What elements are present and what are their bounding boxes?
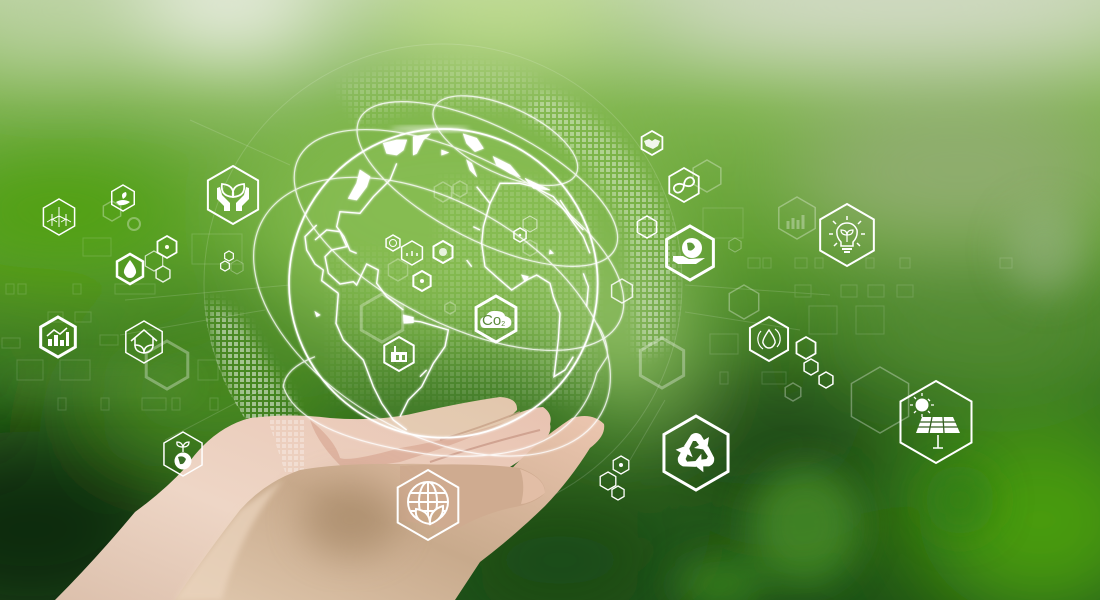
South America outline [336,293,448,430]
icon: water drop [117,254,143,284]
icon: bar chart [41,317,75,357]
icon: house with leaves [126,321,162,363]
icon: CO2 cloud [476,296,516,342]
ghost hexagons in background [103,160,909,433]
palm shadow creases [310,420,505,470]
globe with continent outlines [206,68,658,514]
hex with tiny chart [402,241,422,265]
hex with dot [413,271,431,291]
Africa outline [477,183,590,377]
small hexagons inside globe [386,216,537,291]
icon: globe with leaves [398,470,458,540]
hand shadow [302,484,398,556]
icon: light bulb with sprout [820,204,874,266]
small hexagon cluster [221,251,233,271]
dotted world map sphere [200,40,690,522]
hex with target [386,235,400,251]
hand behind: left cupped hand [55,397,551,600]
thumbnail [520,469,545,504]
hexagon empty right of globe [612,279,632,303]
hand in front: right cupped hand and thumb [175,416,604,600]
icon: hand holding globe [667,226,713,280]
finger gaps [430,412,540,462]
palm dots over hand [268,418,305,478]
hexagon cluster bottom [600,456,629,500]
icon: water cycle drop [750,317,788,361]
hex empty [523,216,537,232]
hexagon empty near globe [637,216,657,238]
icon: wind turbines [43,199,75,235]
hex with dot right [514,228,526,242]
icon: hands holding leaves [208,166,258,224]
icon: hand with sprout small [112,185,134,211]
hexagon trio right [796,337,833,388]
icon: recycle arrows [664,416,728,490]
Greenland and arctic land [315,134,553,323]
hexagon cluster left [145,236,177,282]
orbit ellipses [206,68,658,514]
East coast islands [420,200,588,377]
icon: infinity loop [669,168,699,202]
top globe highlight [390,126,470,132]
hex with factory glyph [433,241,453,263]
faint rectangle grid and lines [2,120,1012,460]
icon: handshake [642,131,662,155]
icon: factory [384,337,414,371]
icon: CO2 cloud: Co [482,312,501,329]
icon: plant on globe [164,432,202,476]
thumb [400,464,545,530]
North America outline [305,163,403,310]
icon: solar panel and sun [900,381,972,463]
icon: CO2 cloud: 2 [501,321,505,328]
